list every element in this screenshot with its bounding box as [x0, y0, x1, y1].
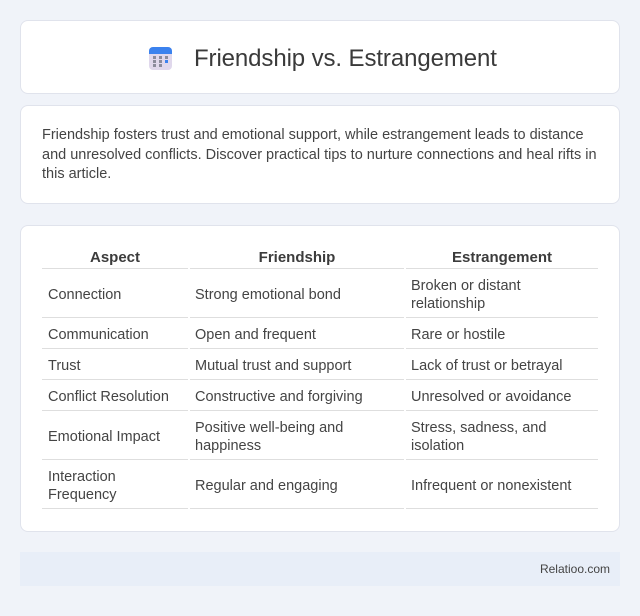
- table: Open and frequent: [195, 327, 316, 343]
- table: Positive well-being and: [195, 420, 343, 436]
- row: Emotional Impact: Emotional Impact: [48, 429, 160, 445]
- table: Lack of trust or betrayal: [411, 358, 563, 374]
- row: Communication: Communication: [48, 327, 149, 343]
- panel: introduction: [20, 105, 620, 204]
- table: Stress, sadness, and: [411, 420, 546, 436]
- row: Interaction Frequency: Interaction: [48, 469, 116, 485]
- intro text: Friendship fosters trust and emotional support, while estrangement leads to distance: [42, 127, 584, 143]
- intro text: this article.: [42, 166, 111, 182]
- header: Friendship: Friendship: [259, 249, 335, 266]
- row: Trust: Trust: [48, 358, 80, 374]
- panel: title card: [20, 20, 620, 94]
- table: Infrequent or nonexistent: [411, 478, 571, 494]
- header: Aspect: Aspect: [90, 249, 140, 266]
- intro text: [42, 127, 597, 182]
- table: isolation: [411, 438, 464, 454]
- row: Connection: Connection: [48, 287, 121, 303]
- row: Conflict Resolution: Conflict Resolution: [48, 389, 169, 405]
- footer bar: [20, 552, 620, 586]
- header: Estrangement: Estrangement: [452, 249, 552, 266]
- title: Friendship vs. Estrangement: [194, 45, 497, 72]
- icon: calendar: [149, 47, 172, 70]
- table: Rare or hostile: [411, 327, 505, 343]
- table: happiness: [195, 438, 261, 454]
- table: Mutual trust and support: [195, 358, 351, 374]
- table: Strong emotional bond: [195, 287, 341, 303]
- panel: comparison table: [20, 225, 620, 532]
- table: Unresolved or avoidance: [411, 389, 571, 405]
- table: Regular and engaging: [195, 478, 338, 494]
- row: Interaction Frequency: Frequency: [48, 487, 117, 503]
- intro text: and unresolved conflicts. Discover practical tips to nurture connections and heal rifts in: [42, 146, 597, 162]
- table: Constructive and forgiving: [195, 389, 363, 405]
- table: relationship: [411, 296, 485, 312]
- table: Broken or distant: [411, 278, 521, 294]
- row: Interaction Frequency: [48, 469, 117, 503]
- footer text: Relatioo.com: [540, 562, 610, 576]
